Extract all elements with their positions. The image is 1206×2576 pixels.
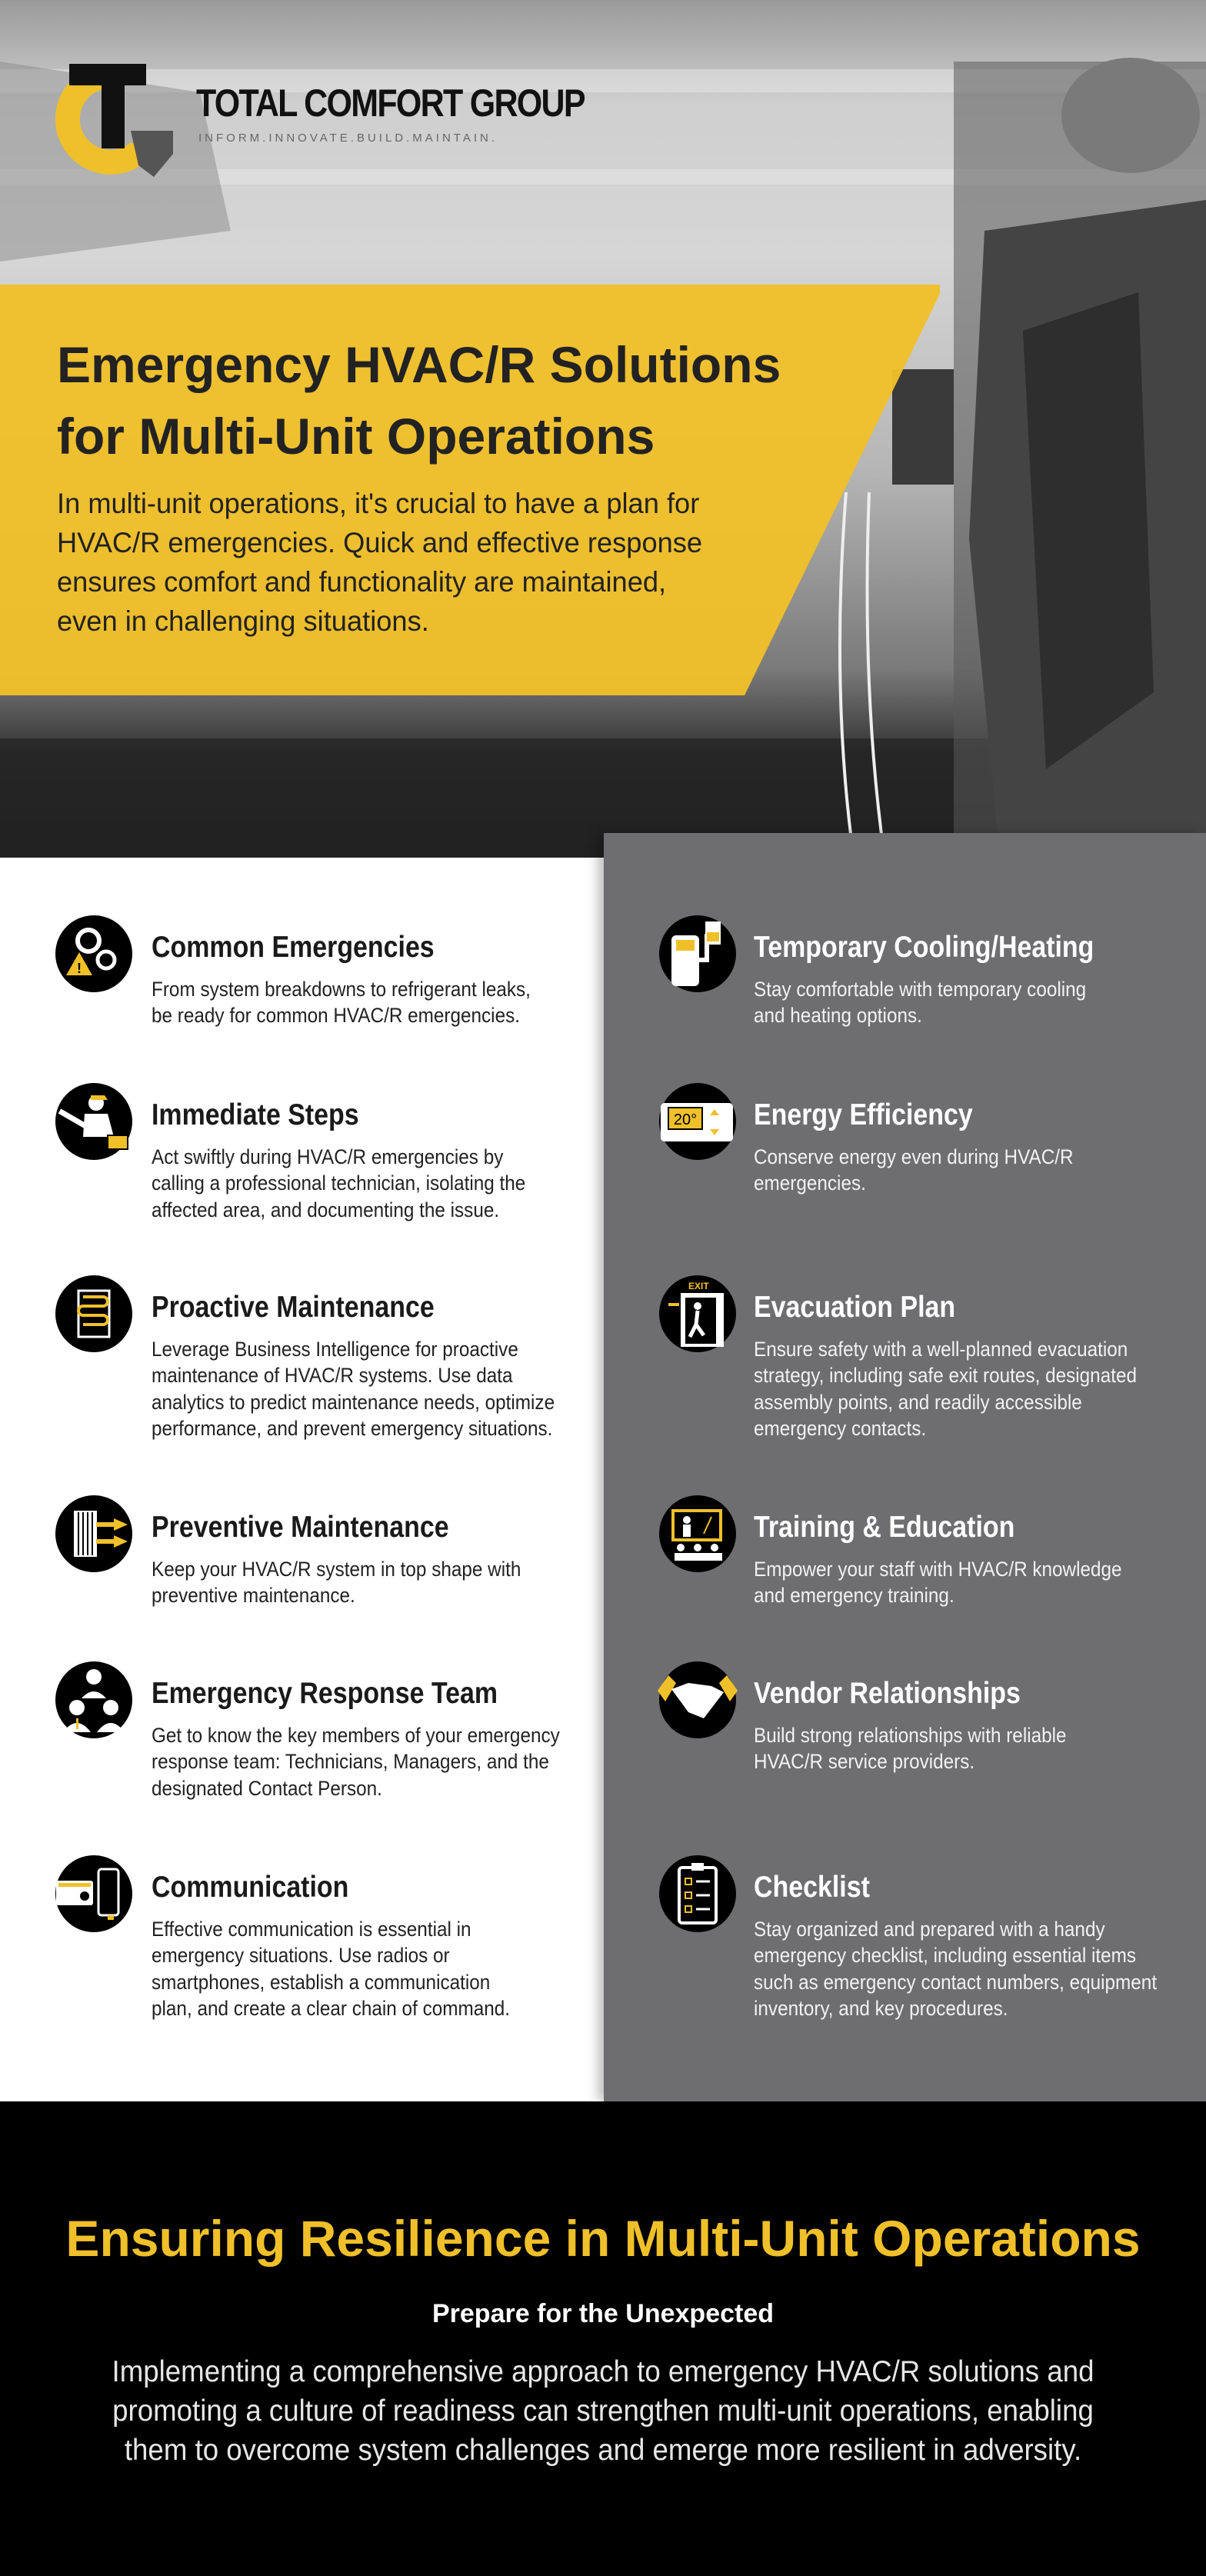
item: checklist — [659, 1855, 1157, 2020]
item: common emergencies — [55, 915, 531, 1027]
item: vendor relationships: Build strong relationships with reliable — [754, 1724, 1067, 1747]
icon: technician — [55, 1083, 132, 1160]
item: common emergencies: Common Emergencies — [152, 931, 435, 964]
item: common emergencies: From system breakdowns to refrigerant leaks, — [152, 978, 531, 1001]
item: common emergencies: be ready for common HVAC/R emergencies. — [152, 1004, 520, 1027]
tagline: INFORM.INNOVATE.BUILD.MAINTAIN. — [198, 132, 498, 145]
item: vendor relationships — [658, 1661, 1067, 1773]
intro text: HVAC/R emergencies. Quick and effective response — [57, 527, 702, 558]
item: immediate steps: Act swiftly during HVAC/R emergencies by — [152, 1145, 503, 1168]
item: proactive maintenance: Leverage Business Intelligence for proactive — [152, 1338, 518, 1361]
item: energy efficiency: Conserve energy even during HVAC/R — [754, 1145, 1074, 1168]
item: vendor relationships: Vendor Relationships — [754, 1677, 1021, 1710]
item: immediate steps — [55, 1083, 525, 1221]
item: communication: Effective communication is essential in — [152, 1918, 471, 1941]
item: emergency response team: response team: Technicians, Managers, and the — [152, 1750, 549, 1773]
company name: TOTAL COMFORT GROUP — [196, 82, 585, 125]
panel: right grey — [604, 833, 1206, 2101]
icon: gears warning: ! — [77, 961, 82, 976]
icon: exit door: EXIT — [688, 1281, 709, 1291]
icon: portable AC — [659, 915, 736, 992]
item: energy efficiency: emergencies. — [754, 1171, 866, 1195]
icon: exit door — [659, 1275, 736, 1352]
item: temporary cooling/heating — [659, 915, 1094, 1027]
footer heading: Ensuring Resilience in Multi-Unit Operations — [65, 2210, 1141, 2267]
panel: right items — [658, 915, 1157, 2020]
icon: filter arrows — [55, 1495, 132, 1572]
footer body text — [112, 2355, 1094, 2467]
item: training & education: Training & Education — [754, 1511, 1014, 1544]
item: energy efficiency: Energy Efficiency — [754, 1098, 973, 1131]
item: proactive maintenance: Proactive Maintenance — [152, 1291, 435, 1324]
item: preventive maintenance: preventive maintenance. — [152, 1584, 355, 1607]
item: temporary cooling/heating: Temporary Cooling/Heating — [754, 931, 1094, 964]
item: energy efficiency — [659, 1083, 1074, 1195]
item: emergency response team — [55, 1661, 560, 1800]
item: emergency response team: Emergency Response Team — [152, 1677, 498, 1710]
icon: logo mark — [55, 63, 173, 177]
item: training & education: Empower your staff with HVAC/R knowledge — [754, 1558, 1122, 1581]
item: preventive maintenance: Preventive Maintenance — [152, 1511, 449, 1544]
item: immediate steps: calling a professional technician, isolating the — [152, 1171, 525, 1195]
item: evacuation plan: assembly points, and readily accessible — [754, 1391, 1082, 1414]
item: preventive maintenance — [55, 1495, 521, 1607]
icon: clipboard — [659, 1855, 736, 1932]
footer body text: them to overcome system challenges and emerge more resilient in adversity. — [125, 2434, 1081, 2467]
item: evacuation plan: strategy, including safe exit routes, designated — [754, 1364, 1137, 1387]
footer subheading: Prepare for the Unexpected — [432, 2299, 774, 2328]
panel: left items — [55, 915, 560, 2020]
item: temporary cooling/heating: and heating options. — [754, 1004, 922, 1027]
item: temporary cooling/heating: Stay comfortable with temporary cooling — [754, 978, 1086, 1001]
item: proactive maintenance: maintenance of HVAC/R systems. Use data — [152, 1364, 513, 1387]
intro text: ensures comfort and functionality are maintained, — [57, 566, 666, 598]
item: communication: smartphones, establish a communication — [152, 1971, 490, 1994]
icon: gears warning — [55, 915, 132, 992]
item: communication: emergency situations. Use radios or — [152, 1944, 450, 1967]
item: communication: Communication — [152, 1871, 348, 1904]
item: checklist: inventory, and key procedures. — [754, 1997, 1008, 2020]
intro text — [57, 488, 702, 637]
item: training & education — [659, 1495, 1122, 1607]
icon: classroom — [659, 1495, 736, 1572]
title — [57, 336, 781, 465]
item: evacuation plan: emergency contacts. — [754, 1417, 926, 1440]
title: for Multi-Unit Operations — [57, 408, 655, 465]
logo — [55, 63, 585, 177]
icon: thermostat: 20° — [674, 1111, 697, 1128]
icon: thermostat — [659, 1083, 736, 1160]
item: checklist: such as emergency contact numbers, equipment — [754, 1971, 1157, 1994]
item: evacuation plan: Evacuation Plan — [754, 1291, 955, 1324]
item: preventive maintenance: Keep your HVAC/R system in top shape with — [152, 1558, 521, 1581]
item: evacuation plan — [659, 1275, 1137, 1440]
yellow banner — [0, 285, 940, 695]
item: communication: plan, and create a clear chain of command. — [152, 1997, 510, 2020]
icon: radio and phone — [55, 1855, 132, 1932]
icon: coil — [55, 1275, 132, 1352]
item: proactive maintenance — [55, 1275, 555, 1440]
item: training & education: and emergency training. — [754, 1584, 954, 1607]
item: emergency response team: designated Contact Person. — [152, 1777, 382, 1800]
item: checklist: Stay organized and prepared with a handy — [754, 1918, 1105, 1941]
footer panel — [0, 2101, 1206, 2576]
icon: handshake — [658, 1661, 738, 1738]
item: emergency response team: Get to know the key members of your emergency — [152, 1724, 560, 1747]
hero photo background — [0, 0, 1206, 858]
item: proactive maintenance: performance, and prevent emergency situations. — [152, 1417, 552, 1440]
item: vendor relationships: HVAC/R service providers. — [754, 1750, 974, 1773]
item: immediate steps: affected area, and documenting the issue. — [152, 1198, 499, 1221]
icon: team — [55, 1661, 132, 1738]
item: checklist: Checklist — [754, 1871, 870, 1904]
item: communication — [55, 1855, 510, 2020]
item: checklist: emergency checklist, including essential items — [754, 1944, 1136, 1967]
intro text: even in challenging situations. — [57, 605, 429, 637]
footer body text: promoting a culture of readiness can strengthen multi-unit operations, enabling — [112, 2394, 1094, 2428]
item: proactive maintenance: analytics to predict maintenance needs, optimize — [152, 1391, 555, 1414]
title: Emergency HVAC/R Solutions — [57, 336, 781, 393]
footer body text: Implementing a comprehensive approach to emergency HVAC/R solutions and — [112, 2355, 1094, 2388]
intro text: In multi-unit operations, it's crucial to have a plan for — [57, 488, 699, 519]
item: immediate steps: Immediate Steps — [152, 1098, 359, 1131]
item: evacuation plan: Ensure safety with a well-planned evacuation — [754, 1338, 1128, 1361]
